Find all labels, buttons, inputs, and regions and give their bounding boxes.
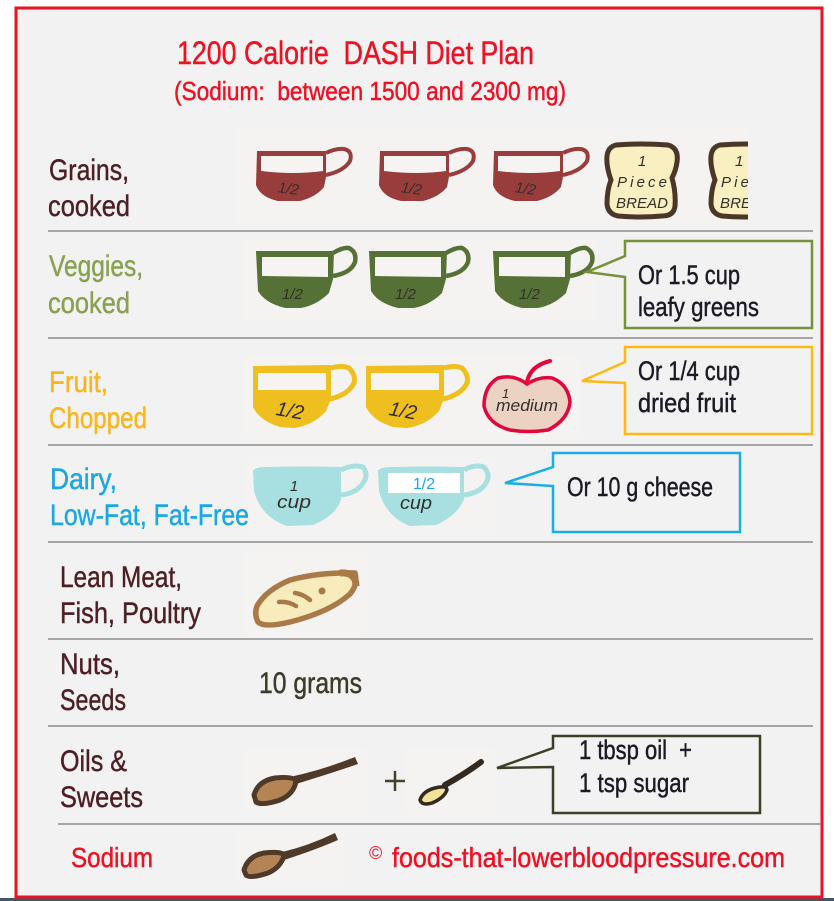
icon: bread slice 1: Piece [617,174,667,191]
subtitle: (Sodium: between 1500 and 2300 mg) [174,76,566,106]
icon: half cup grains 3 [493,149,588,201]
row: oils [60,735,760,814]
icon: half cup dairy: 1/2 [413,476,435,493]
label: grains: cooked [48,190,130,223]
label: sodium: Sodium [71,842,153,873]
callout: leafy greens: leafy greens [638,292,759,322]
icon: half cup veggies 2 [369,248,468,308]
icon: bread slice 2 cropped: Piece [721,174,771,191]
label: nuts: Nuts, [60,648,120,681]
label: grains [48,154,130,223]
callout: dried fruit: Or 1/4 cup [638,356,740,386]
icon: bread slice 1 [607,144,677,217]
callout: dried fruit: dried fruit [638,388,737,418]
callout: leafy greens: Or 1.5 cup [638,260,740,290]
icon: bread slice 2 cropped: 1 [735,153,743,170]
icon: half cup veggies 1 [256,248,355,308]
label: meat [60,561,201,630]
label: veggies [48,250,143,320]
callout: cheese: Or 10 g cheese [567,472,713,502]
icon: half cup grains 1 [256,149,351,201]
label: nuts [60,648,126,717]
icon: meat [256,573,356,625]
icon: half cup grains 1: 1/2 [277,179,301,199]
row: fruit [49,347,812,435]
icon: half cup veggies 3: 1/2 [519,286,541,303]
row: sodium [71,833,785,877]
label: oils: Sweets [60,781,143,814]
icon: half cup dairy [378,466,488,526]
label: nuts: Seeds [60,684,126,717]
icon: apple [484,361,570,432]
icon: half cup veggies 1: 1/2 [282,286,304,303]
icon: one cup dairy: cup [277,492,311,512]
row: grains [48,144,781,223]
icon: half cup grains 2 [379,149,474,201]
icon: bread slice 2 cropped: BREAD [720,195,772,212]
icon: half cup fruit 1 [253,365,354,428]
label: fruit [49,366,147,435]
icon: half cup fruit 2 [366,365,467,428]
title: 1200 Calorie DASH Diet Plan [177,35,534,71]
copyright credit: foods-that-lowerbloodpressure.com [392,842,785,873]
label: meat: Fish, Poultry [60,597,201,630]
row: dairy [50,453,740,532]
icon: one cup dairy: 1 [290,478,298,495]
callout: oil and sugar [497,735,760,813]
label: veggies: Veggies, [49,250,143,283]
bottom edge strip [0,898,834,901]
icon: bread slice 2 cropped [708,142,748,220]
copyright credit: © [369,843,382,863]
label: fruit: Chopped [49,402,147,435]
icon: half cup grains 2: 1/2 [400,179,424,199]
nuts amount: 10 grams [259,667,362,700]
label: grains: Grains, [49,154,129,187]
callout: dried fruit [582,347,812,434]
callout: oil and sugar: 1 tsp sugar [579,768,689,798]
label: dairy [50,463,249,532]
row: nuts [60,648,362,717]
row: veggies [48,241,812,328]
icon: half cup grains 3: 1/2 [514,179,538,199]
icon: bread slice 1: BREAD [616,195,668,212]
icon: teaspoon [420,762,481,804]
icon: apple: 1 [502,386,509,401]
icon: sodium spoon [244,833,338,877]
plus sign [385,771,405,791]
icon: half cup fruit 1: 1/2 [274,398,305,425]
icon: one cup dairy [253,466,366,526]
label: oils: Oils & [60,745,127,778]
row: lean meat [60,561,356,630]
callout: leafy greens [587,241,812,328]
label: fruit: Fruit, [49,366,108,399]
label: dairy: Low-Fat, Fat-Free [50,499,249,532]
icon: half cup dairy: cup [400,493,432,513]
label: veggies: cooked [48,287,130,320]
icon: half cup fruit 2: 1/2 [387,398,418,425]
label: oils [60,745,143,814]
icon: apple: medium [496,396,558,415]
icon: bread slice 1: 1 [638,153,646,170]
label: meat: Lean Meat, [60,561,182,594]
label: dairy: Dairy, [50,463,117,496]
icon: half cup veggies 2: 1/2 [395,286,417,303]
icon: tablespoon [254,757,358,804]
icon: half cup veggies 3 [493,248,592,308]
callout: oil and sugar: 1 tbsp oil + [579,735,692,765]
callout: cheese [505,453,740,532]
